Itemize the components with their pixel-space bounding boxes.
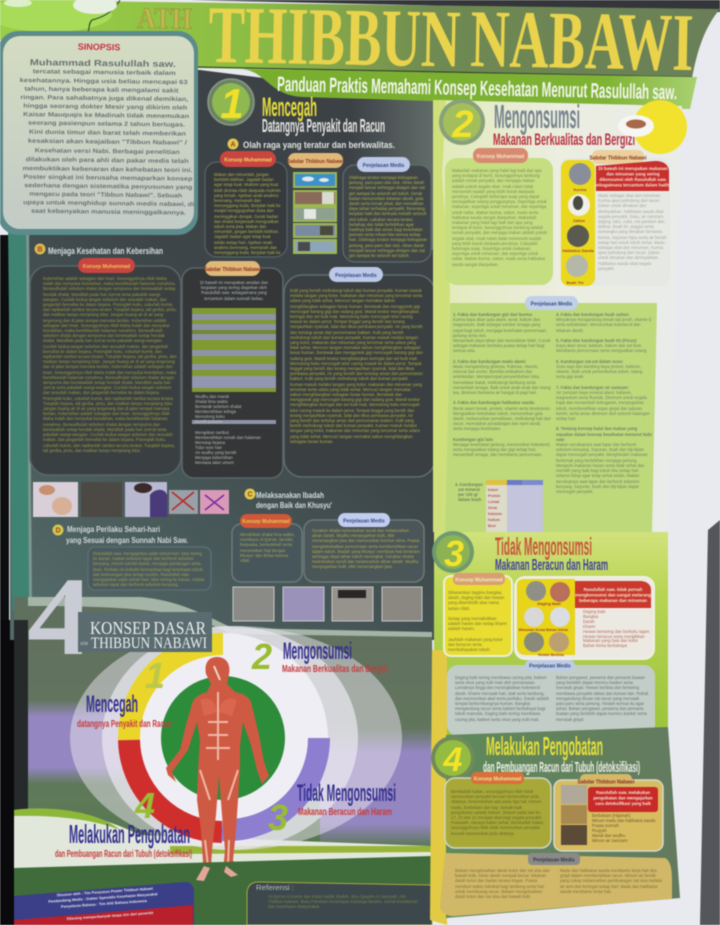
panel 3: konsep: Diharamkan bagimu bangkai, darah, daging babi dan hewan yang disembelih atas nama selain Allah.: [448, 590, 504, 611]
pill: Penjelasan Medis: [529, 664, 571, 670]
label: Mengonsumsi: Mengonsumsi: [283, 638, 352, 665]
panel 4: medical explanation: [440, 853, 672, 916]
pill: Sabdar Thibbun Nabawi: [204, 267, 262, 273]
food strip: Buah Tin: [566, 280, 584, 285]
synopsis text: sederhana dengan sistematika penyusunan yang: [24, 183, 193, 191]
panel B: nabawi list: Shalat lima waktu: [195, 399, 228, 404]
panel 2: konsep: [445, 148, 553, 285]
panel A: images: [287, 153, 345, 253]
heading: section 3: [495, 533, 608, 574]
text: Datangnya Penyakit dan Racun: [262, 116, 385, 136]
panel C: medical explanation: [304, 513, 424, 582]
panel B: nabawi list: Menutup bejana: [195, 440, 225, 445]
panel B: nabawi list: [182, 261, 283, 478]
panel 2: medical explanation: 2. Fakta dan kandungan madu alami:: [453, 359, 526, 364]
panel 2: nabawi foods: Madu sebagai obat dan minuman. Kurma ajwa pelindung dari racun. Zaitun untuk dimakan dan diminyakkan. Habbatus sauda obat segala penyakit. Susu, air zamzam, daging, labu, cuka, roti gandum dan delima. Buah tin, anggur serta semangka yang dimakan bersama kurma. Sayuran hijau serta air bersih setiap hari untuk tubuh sehat. Madu sebagai obat dan minuman. Kurma ajwa pelindung dari racun. Zaitun untuk dimakan dan diminyakkan. Habbatus sauda obat segala penyakit.: [598, 193, 666, 271]
right column base: [433, 100, 687, 532]
panel 2: medical explanation: Air zamzam kaya mineral alami: kalsium, magnesium serta fluorida. Diminum untuk segala hajat dan menambah kebugaran, menyegarkan tubuh, membersihkan organ ginjal dan saluran kemih, serta aman diminum oleh seluruh kalangan setiap hari.: [556, 390, 650, 421]
pill: Konsep Muhammad: [474, 776, 521, 782]
panel B: medical explanation: [284, 267, 435, 477]
wheel numbers: 3: [268, 797, 288, 838]
panel 2: nabawi foods: [560, 150, 672, 286]
panel 4: konsep: Berobatlah kalian, sesungguhnya Allah tidak menurunkan penyakit kecuali menurunkan pula obatnya. Kesembuhan ada pada tiga hal: minum madu, berbekam dan kay. Sebaik-baik pengobatan adalah bekam. Bekam pada hari ke-17, 19 dan 21 menjadi obat bagi segala penyakit. Puasalah, niscaya kalian sehat. Berobatlah kalian, sesungguhnya Allah tidak menurunkan penyakit kecuali menurunkan pula obatnya.: [451, 789, 544, 836]
section 3 background: [430, 532, 668, 925]
panel: credits: Disusun oleh : Tim Penyusun Poster Thibbun Nabawi: [57, 887, 153, 897]
panel: references: Al-Qur'an Al-Karim dan Kitab Hadits Shahih. Ibnu Qayyim Al-Jauziyah, Ath-Thibbun Nabawi. Buku Panduan Kesehatan Keluarga Muslim. Jurnal Kedokteran dan Kesehatan Masyarakat.: [268, 894, 418, 909]
subheading A: A: [230, 142, 236, 148]
nutrition table: Kalium: [488, 518, 500, 522]
label: Mencegah: Mencegah: [86, 691, 138, 718]
panel: credits: [14, 882, 194, 925]
panel 3: nabawi forbidden foods: [515, 577, 654, 659]
panel 3: medical explanation: Daging babi sering membawa cacing pita, bakteri serta virus yang sulit mati oleh pemanasan. Lemaknya tinggi dan meningkatkan kolesterol darah. Khamr merusak hati, otak serta lambung, dan menurunkan akal serta perilaku. Darah adalah tempat berkembangnya kuman. Bangkai mengandung racun serta bakteri berbahaya bagi tubuh manusia. Daging babi sering membawa cacing pita, bakteri serta virus yang sulit mati.: [455, 675, 549, 722]
heading: section 2: Mengonsumsi: [494, 98, 580, 135]
panel B: nabawi list: Membersihkan telinga: [195, 409, 236, 414]
ring segment: yellow: [129, 644, 222, 740]
title: [137, 0, 694, 88]
panel: synopsis: [0, 31, 198, 235]
panel 3: nabawi forbidden foods: Khamr: [583, 624, 595, 629]
synopsis text: Muhammad Rasulullah saw.: [30, 57, 176, 69]
text: Tidak Mengonsumsi: [297, 780, 396, 807]
photos: [561, 785, 587, 845]
badge: number 1: [208, 79, 254, 127]
panel 2: medical explanation: [445, 296, 657, 532]
heading: section 2: [493, 98, 635, 149]
nutrition table: Protein: [488, 494, 500, 498]
heading: four basic concepts: ATH: [80, 641, 88, 646]
nutrition table: Besi: [488, 524, 496, 528]
figure: human muscle body: [166, 657, 269, 882]
heading: four basic concepts: [78, 612, 212, 652]
food strip: Habbatus Sauda: [562, 248, 594, 253]
nutrition table: zat mineral: [458, 487, 480, 492]
badge: number 3: 3: [444, 533, 464, 574]
icon: food plate: [618, 115, 654, 137]
subheading B: [34, 244, 163, 256]
diagram: wheel ring: [118, 633, 328, 843]
panel B: nabawi list: Menjaga kebersihan: [195, 455, 233, 460]
red callout: [595, 161, 672, 191]
panel: credits: Penyelaras Bahasa : Tim Ahli Bahasa Indonesia: [61, 899, 148, 909]
subheading D: Menjaga Perilaku Sehari-hari: [67, 525, 160, 534]
heading: section 1: Mencegah: [262, 92, 317, 122]
synopsis text: saat kebanyakan manusia meninggalkannya.: [31, 209, 186, 217]
panel 3: nabawi forbidden foods: Darah: [583, 619, 594, 624]
food strip: Kurma: [574, 187, 587, 192]
label: Mengonsumsi: Makanan Berkualitas dan Bergizi: [282, 663, 388, 675]
label: Mengonsumsi: [282, 638, 388, 675]
badge: number 3: [432, 531, 474, 574]
wheel numbers: 4: [134, 785, 155, 826]
wheel numbers: 1: [145, 655, 165, 696]
panel 3: nabawi forbidden foods: Makanan yang basi dan kotor: [583, 638, 638, 643]
panel 2: medical explanation: 1. Fakta dan kandungan gizi dari kurma:: [453, 312, 533, 317]
panel B: konsep: Kebersihan adalah sebagian dari iman. Sesungguhnya Allah Maha Indah dan menyukai keindahan, maka bersihkanlah halaman rumahmu. Berwudhulah sebelum shalat dengan sempurna dan bersiwaklah setiap hendak shalat. Mandilah pada hari Jum'at serta pakailah wangi-wangian. Cucilah kedua tangan sebelum dan sesudah makan, dan janganlah bernafas ke dalam bejana. Potonglah kuku, cukurlah kumis, dan rapikanlah rambut secara teratur. Tutuplah bejana, tali geriba, pintu, dan matikan lampu menjelang tidur. Jangan buang air di air yang tergenang dan di jalan tempat manusia berlalu. Kebersihan adalah sebagian dari iman. Sesungguhnya Allah Maha Indah dan menyukai keindahan, maka bersihkanlah halaman rumahmu. Berwudhulah sebelum shalat dengan sempurna dan bersiwaklah setiap hendak shalat. Mandilah pada hari Jum'at serta pakailah wangi-wangian. Cucilah kedua tangan sebelum dan sesudah makan, dan janganlah bernafas ke dalam bejana. Potonglah kuku, cukurlah kumis, dan rapikanlah rambut secara teratur. Tutuplah bejana, tali geriba, pintu, dan matikan lampu menjelang tidur. Jangan buang air di air yang tergenang dan di jalan tempat manusia berlalu. Kebersihan adalah sebagian dari iman. Sesungguhnya Allah Maha Indah dan menyukai keindahan, maka bersihkanlah halaman rumahmu. Berwudhulah sebelum shalat dengan sempurna dan bersiwaklah setiap hendak shalat. Mandilah pada hari Jum'at serta pakailah wangi-wangian. Cucilah kedua tangan sebelum dan sesudah makan, dan janganlah bernafas ke dalam bejana. Potonglah kuku, cukurlah kumis, dan rapikanlah rambut secara teratur. Tutuplah bejana, tali geriba, pintu, dan matikan lampu menjelang tidur. Jangan buang air di air yang tergenang dan di jalan tempat manusia berlalu. Kebersihan adalah sebagian dari iman. Sesungguhnya Allah Maha Indah dan menyukai keindahan, maka bersihkanlah halaman rumahmu. Berwudhulah sebelum shalat dengan sempurna dan bersiwaklah setiap hendak shalat. Mandilah pada hari Jum'at serta pakailah wangi-wangian. Cucilah kedua tangan sebelum dan sesudah makan, dan janganlah bernafas ke dalam bejana. Potonglah kuku, cukurlah kumis, dan rapikanlah rambut secara teratur. Tutuplah bejana, tali geriba, pintu, dan matikan lampu menjelang tidur.: [43, 276, 177, 453]
synopsis text: tercatat sebagai manusia terbaik dalam: [33, 69, 176, 77]
red callout: Di bawah ini merupakan makanan: [598, 166, 668, 171]
panel A: images: Sabdar Thibbun Nabawi: [287, 159, 345, 165]
panel 2: medical explanation: Susu sapi dan kambing kaya protein, kalsium, vitamin. Baik untuk pertumbuhan tubuh, tulang serta gigi anak.: [556, 364, 642, 379]
panel 2: medical explanation: 7. Fakta dan kandungan air zamzam:: [556, 385, 629, 390]
bottom green base: [14, 856, 432, 925]
panel B: nabawi list: Merapikan rambut: [195, 430, 229, 435]
panel 2: medical explanation: 4. Fakta dan kandungan buah zaitun:: [556, 312, 630, 317]
food strip: [561, 160, 595, 286]
pill: [329, 267, 383, 282]
pill: [528, 853, 580, 865]
subheading C: C: [247, 492, 253, 498]
pill: [204, 261, 262, 276]
panel B: nabawi list: Bersiwak sebelum shalat: [195, 404, 241, 409]
panel 4: nabawi treatments: [554, 774, 663, 851]
panel 2: medical explanation: 6. Kandungan zat-zat dalam susu:: [556, 359, 623, 364]
nutrition table: Kalsium: [488, 512, 502, 516]
panel C: konsep: [232, 514, 302, 582]
yellow image area: Daging Babi: [537, 601, 561, 606]
synopsis text: kesehatannya. Hingga usia beliau mencapai 63: [20, 78, 188, 86]
synopsis text: mengacu pada teori "Tibbun Nabawi". Sebuah: [29, 192, 183, 200]
panel 2: medical explanation: Kurma kaya akan gula alami, serat, kalium dan magnesium. Baik sebagai sumber tenaga yang cepat bagi tubuh, menjaga kesehatan pencernaan, jantung serta otot.: [453, 317, 547, 338]
badge: number 4: 4: [443, 741, 463, 779]
subheading D: yang Sesuai dengan Sunnah Nabi Saw.: [66, 536, 188, 545]
subheading B: B: [37, 246, 43, 254]
panel 2: medical explanation: Kandungan gizi lain:: [453, 437, 494, 442]
red callout: dan minuman yang sering: [606, 172, 660, 176]
heading: section 3: Makanan Beracun dan Haram: [495, 557, 608, 574]
red callout: beberapa makanan dan minuman: [579, 598, 647, 603]
feet over base: [196, 866, 238, 881]
pill: [78, 258, 135, 273]
synopsis text: Kini dunia timur dan barat telah memberikan: [29, 130, 186, 138]
text: Melakukan Pengobatan: [69, 819, 190, 849]
badge: number 1: 1: [220, 80, 244, 127]
nutrition table: per 100 gr: [458, 492, 478, 497]
label: Melakukan Pengobatan: [55, 819, 192, 860]
pill: [525, 660, 575, 671]
panel 2: medical explanation: Berisi asam lemak, protein, vitamin serta timokuinon. Menguatkan kekebalan tubuh, menurunkan gula darah, melancarkan pernafasan, melindungi hati dari racun, meredakan peradangan dan nyeri sendi, serta menjaga kesehatan.: [453, 406, 551, 431]
panel 4: nabawi treatments: Minum air zamzam: [592, 838, 627, 843]
panel 3: konsep: Setiap yang memabukkan adalah haram dan setiap khamr adalah haram.: [448, 616, 507, 631]
panel 4: konsep: [445, 772, 551, 848]
panel B: nabawi list: Memotong kuku: [195, 414, 225, 419]
label: Melakukan Pengobatan: dan Pembuangan Racun dari Tubuh (detoksifikasi): [55, 848, 192, 860]
yellow image area: Bahan Kimia: [546, 628, 569, 632]
panel C: medical explanation: Gerakan shalat melenturkan sendi dan melancarkan aliran darah. Wudhu menyegarkan kulit, zikir menenangkan jiwa dan menurunkan hormon stres. Puasa mengistirahatkan pencernaan serta membersihkan racun dalam tubuh. Ibadah yang khusyu' membuat hati tenteram sehingga daya tahan tubuh meningkat. Gerakan shalat melenturkan sendi dan melancarkan aliran darah. Wudhu menyegarkan kulit, zikir menenangkan jiwa.: [312, 528, 420, 569]
pill: Konsep Muhammad: [224, 158, 272, 164]
panel 3: nabawi forbidden foods: Hewan bertaring dan berkuku tajam: [583, 629, 649, 634]
pill: Penjelasan Medis: [343, 518, 385, 524]
center circle: [161, 676, 285, 800]
panel 4: medical explanation: Madu dan habbatus sauda membantu kerja hati dan ginjal dalam membersihkan racun. Minum air bersih yang cukup melancarkan pembuangan zat sisa melalui air seni dan keringat setiap hari. Madu dan habbatus sauda membantu kerja hati.: [560, 868, 662, 894]
diagram: wheel halo: [70, 626, 402, 850]
wheel numbers: 2: [251, 636, 272, 677]
yellow image area: Minuman Keras: [519, 628, 545, 632]
panel 2: medical explanation: Minyaknya mengandung lemak tak jenuh, vitamin E serta antioksidan. Menurunkan kolesterol dan tekanan darah.: [556, 317, 652, 333]
panel: credits: Dilarang memperbanyak tanpa izin dari penerbit: [67, 911, 154, 921]
red callout: Rasulullah saw. melakukan: [596, 790, 650, 795]
panel 2: konsep: Makanlah makanan yang halal lagi baik dari apa yang terdapat di bumi. Sesungguhnya lambung adalah rumah penyakit, dan menjaga makan adalah pokok segala obat. Anak Adam tidak memenuhi wadah yang lebih buruk daripada perutnya. Cukuplah beberapa suap yang dapat menegakkan tulang punggungnya. Sepertiga untuk makanan, sepertiga untuk minuman, dan sepertiga untuk nafas. Makan kurma, zaitun, madu serta habbatus sauda sangat dianjurkan. Makanlah makanan yang halal lagi baik dari apa yang terdapat di bumi. Sesungguhnya lambung adalah rumah penyakit, dan menjaga makan adalah pokok segala obat. Anak Adam tidak memenuhi wadah yang lebih buruk daripada perutnya. Cukuplah beberapa suap. Sepertiga untuk makanan, sepertiga untuk minuman, dan sepertiga untuk nafas. Makan kurma, zaitun, madu serta habbatus sauda sangat dianjurkan.: [452, 168, 547, 267]
red callout: dikonsumsi oleh Rasulullah saw.: [599, 177, 667, 182]
food strip: Zaitun: [573, 218, 586, 223]
panel B: nabawi list: Tidur sore hari: [195, 445, 222, 450]
panel 4: nabawi treatments: Berbekam (Hijamah): [592, 813, 630, 818]
synopsis text: membuktikan kebenaran dan kehebatan teori ini.: [22, 166, 193, 174]
panel 2: medical explanation: 3. Fakta dan kandungan habbatus sauda:: [453, 400, 535, 405]
pill: Penjelasan Medis: [531, 302, 573, 308]
red callout: [575, 581, 651, 608]
synopsis text: Poster singkat ini berusaha memaparkan konsep: [23, 175, 193, 183]
photo row: health habits: [33, 482, 229, 517]
panel 2: medical explanation: Madu mengandung glukosa, fruktosa, vitamin, mineral dan enzim. Bersifat antibakteri dan antioksidan. Mempercepat penyembuhan luka, meredakan batuk, melindungi lambung serta menambah tenaga. Baik untuk anak-anak dan orang tua, diminum bersama air hangat di pagi hari.: [453, 364, 551, 395]
heading: four basic concepts: KONSEP DASAR: [90, 618, 206, 638]
pill: Penjelasan Medis: [335, 273, 377, 279]
yellow image area: [517, 579, 575, 657]
panel 3: medical explanation: [447, 660, 655, 736]
panel 4: medical explanation: Bekam mengeluarkan darah kotor dan zat sisa dari bawah kulit. Aliran darah menjadi lancar, tekanan darah turun dan badan terasa ringan. Puasa memberi waktu istirahat bagi lambung serta hati untuk membuang racun. Bekam mengeluarkan darah kotor dan zat sisa dari bawah kulit.: [455, 868, 550, 899]
panel: references: Referensi :: [256, 885, 294, 892]
panel 4: nabawi treatments: Mandi dan wudhu: [592, 833, 625, 838]
synopsis text: seorang pasienpun selama 2 tahun bertugas.: [28, 121, 186, 129]
nutrition table: [455, 480, 543, 532]
label: Mencegah: datangnya Penyakit dan Racun: [77, 718, 172, 730]
panel: credits: Pembimbing Medis : Dokter Spesialis Kesehatan Masyarakat: [48, 892, 158, 904]
synopsis text: Kesehatan versi Nabi. Berbagai penelitian: [35, 148, 180, 156]
panel 2: medical explanation: Kaya akan serat, kalsium, kalium dan zat besi. Membantu pencernaan serta menguatkan tulang.: [556, 343, 648, 353]
red callout: cara detoksifikasi yang baik: [595, 801, 651, 806]
panel 3: nabawi forbidden foods: Hewan beracun serta menjijikkan: [583, 634, 645, 639]
synopsis text: tahun, hanya beberapa kali mengalami sakit: [24, 87, 179, 94]
wheel numbers: [134, 636, 288, 838]
section: four basic concepts background: [14, 597, 436, 925]
pill: Penjelasan Medis: [363, 163, 405, 169]
panel 4: nabawi treatments: Minum madu dan habbatus sauda: [592, 818, 655, 823]
red callout: Rasulullah saw. tidak pernah: [584, 587, 643, 592]
nutrition table: 4. Kandungan: [455, 482, 483, 487]
subheading C: Melaksanakan Ibadah: [256, 491, 324, 500]
red callout: mengkonsumsi dan sangat melarang: [575, 592, 651, 598]
synopsis text: [18, 57, 196, 217]
subheading A: Olah raga yang teratur dan berkwalitas.: [243, 140, 395, 150]
pill: Konsep Muhammad: [83, 264, 130, 270]
ring segment: purple: [222, 738, 319, 830]
panel 2: medical explanation: 5. Fakta dan kandungan buah tin (Ficus):: [556, 338, 637, 343]
panel D: text: Rasulullah saw. mengajarkan adab sehari-hari: tidur miring ke kanan, makan sebelum lapar dan berhenti sebelum kenyang, minum sambil duduk, menjaga pandangan serta lisan. Perilaku ini terbukti bermanfaat bagi kesehatan tubuh dan ketenangan jiwa setiap muslim. Rasulullah saw. mengajarkan adab sehari-hari: tidur miring ke kanan, makan sebelum lapar dan berhenti sebelum kenyang.: [93, 551, 205, 587]
dark panel: prevention: [10, 62, 438, 640]
label: Tidak Mengonsumsi: Makanan Beracun dan Haram: [298, 806, 392, 818]
left teal strip: [8, 225, 32, 610]
badge: number 2: [439, 99, 485, 146]
photo row: worship: [233, 587, 422, 621]
panel B: medical explanation: Kulit yang bersih melindungi tubuh dari kuman penyakit. Kuman masuk melalui tangan yang kotor, makanan dan minuman yang tercemar serta udara yang tidak sehat. Mencuci tangan memakai sabun menghilangkan sebagian besar kuman. Bersiwak dan menggosok gigi mencegah karang gigi dan radang gusi. Mandi teratur menghilangkan keringat dan sel kulit mati. Memotong kuku mencegah telur cacing masuk ke dalam perut. Tempat tinggal yang bersih dan terang menjauhkan nyamuk, lalat dan tikus pembawa penyakit. Air yang bersih dan tertutup aman dari pencemaran bakteri. Kulit yang bersih melindungi tubuh dari kuman penyakit. Kuman masuk melalui tangan yang kotor, makanan dan minuman yang tercemar serta udara yang tidak sehat. Mencuci tangan memakai sabun menghilangkan sebagian besar kuman. Bersiwak dan menggosok gigi mencegah karang gigi dan radang gusi. Mandi teratur menghilangkan keringat dan sel kulit mati. Memotong kuku mencegah telur cacing masuk ke dalam perut. Tempat tinggal yang bersih dan terang menjauhkan nyamuk, lalat dan tikus pembawa penyakit. Air yang bersih dan tertutup aman dari pencemaran bakteri. Kulit yang bersih melindungi tubuh dari kuman penyakit. Kuman masuk melalui tangan yang kotor, makanan dan minuman yang tercemar serta udara yang tidak sehat. Mencuci tangan memakai sabun menghilangkan sebagian besar kuman. Bersiwak dan menggosok gigi mencegah karang gigi dan radang gusi. Mandi teratur menghilangkan keringat dan sel kulit mati. Memotong kuku mencegah telur cacing masuk ke dalam perut. Tempat tinggal yang bersih dan terang menjauhkan nyamuk, lalat dan tikus pembawa penyakit. Air yang bersih dan tertutup aman dari pencemaran bakteri. Kulit yang bersih melindungi tubuh dari kuman penyakit. Kuman masuk melalui tangan yang kotor, makanan dan minuman yang tercemar serta udara yang tidak sehat. Mencuci tangan memakai sabun menghilangkan sebagian besar kuman.: [290, 288, 423, 444]
panel A: medical explanation: Olahraga teratur menjaga kebugaran jantung, paru-paru dan otot. Aliran darah menjadi lancar sehingga oksigen dan zat gizi sampai ke seluruh sel tubuh. Gerak badan menurunkan tekanan darah, gula darah serta lemak jahat, dan menaikkan daya tahan terhadap penyakit. Berenang, berjalan kaki dan berkuda melatih seluruh otot tubuh. Lakukan secara teratur, bertahap dan tidak berlebihan agar hasilnya baik dan aman bagi kesehatan jasmani serta rohani kita semua setiap hari. Olahraga teratur menjaga kebugaran jantung, paru-paru dan otot. Aliran darah menjadi lancar sehingga oksigen dan zat gizi sampai ke seluruh sel tubuh.: [349, 175, 427, 258]
header band: [0, 0, 720, 78]
panel 2: medical explanation: 8. Tentang konsep halal dan makan yang sepadan dalam konsep kesehatan menurut Nabi saw:: [556, 426, 652, 442]
panel 3: konsep: [444, 573, 512, 656]
panel C: konsep: Mendirikan shalat lima waktu, membaca Al-Qur'an, berzikir, berpuasa, bersedekah serta menunaikan haji dengan khusyu' dan ikhlas karena Allah.: [240, 532, 295, 563]
pill: Konsep Muhammad: [242, 519, 290, 525]
label: Mencegah: [77, 691, 172, 730]
subheading B: Menjaga Kesehatan dan Kebersihan: [48, 246, 163, 256]
synopsis text: kesaksian akan keajaiban "Tibbun Nabawi" /: [28, 139, 187, 147]
subheading C: dengan Baik dan Khusyu': [256, 501, 332, 510]
pill: Konsep Muhammad: [455, 578, 503, 584]
badge: number 2: 2: [451, 104, 474, 146]
panel 2: medical explanation: Menambah daya tahan dan meredakan lelah. Cocok sebagai makanan berbuka puasa setiap hari bagi semua usia.: [453, 338, 550, 353]
panel 4: nabawi treatments: Puasa sunnah: [592, 823, 619, 828]
panel B: nabawi list: Air wudhu yang bersih: [195, 450, 236, 455]
subheading D: [52, 524, 188, 545]
panel 2: medical explanation: Makan secukupnya saat lapar dan berhenti sebelum kenyang. Sayuran, buah dan biji-bijian dapat mencegah penyakit. Menghindari makanan berlemak yang berlebihan menjaga jantung. Menjauhi makanan haram serta tidak sehat dan memilih yang baik bagi tubuh kita setiap hari selama hidup agar tetap sehat selalu. Makan secukupnya saat lapar dan berhenti sebelum kenyang. Sayuran, buah dan biji-bijian dapat mencegah penyakit.: [556, 442, 648, 494]
yellow tab: [214, 633, 223, 655]
title: ATH: [137, 2, 192, 36]
panel 2: medical explanation: Menjaga kesehatan jantung, menurunkan kolesterol, serta menguatkan tulang dan gigi setiap hari, menambah tenaga, dan membantu pencernaan.: [453, 442, 550, 457]
pill: [525, 296, 578, 310]
panel 4: nabawi treatments: Ruqyah: [592, 828, 606, 833]
synopsis heading: SINOPSIS: [78, 42, 120, 52]
nutrition table: Lemak: [488, 500, 499, 504]
panel 3: konsep: Jauhilah makanan yang kotor dan beracun serta membahayakan tubuh.: [448, 637, 503, 652]
heading: section 1: [262, 92, 385, 136]
yellow image area: Hewan Berbisa: [538, 653, 565, 657]
synopsis text: ringan. Para sahabatnya juga dikenal demikian,: [20, 95, 189, 103]
ring segment: red: [129, 740, 222, 832]
panel: references: [247, 882, 432, 925]
big number 4: 4: [27, 555, 93, 679]
panel 3: nabawi forbidden foods: Bahan kimia berbahaya: [583, 643, 627, 648]
pill: Konsep Muhammad: [477, 154, 524, 160]
panel A: konsep: [205, 151, 287, 257]
pill: Sabdar Thibbun Nabawi: [590, 156, 647, 162]
table stripes: [192, 308, 276, 424]
synopsis text: Kaisar Mauquqis ke Madinah tidak menemukan: [23, 112, 190, 120]
label: Tidak Mengonsumsi: [297, 780, 396, 818]
panel B: nabawi list: Wudhu dan mandi: [195, 394, 229, 399]
subheading C: [244, 488, 332, 510]
pill: Penjelasan Medis: [533, 858, 575, 864]
red callout: sebagaimana tercantum dalam hadits: [595, 182, 672, 188]
synopsis text: upaya untuk menghidup sunnah medis nabawi, di: [23, 200, 195, 208]
panel B: nabawi list: Bersih pakaian: [195, 419, 223, 424]
subheading D: D: [55, 528, 61, 534]
panel 3: medical explanation: Bahan pengawet, pewarna dan pemanis buatan yang berlebih dapat memicu kanker serta merusak ginjal. Hewan berbisa dan bertaring membawa penyakit rabies dan kuman lain. Rokok mengandung ribuan zat racun yang merusak paru-paru serta jantung. Hindari semua itu agar sehat. Bahan pengawet, pewarna dan pemanis buatan yang berlebih dapat memicu kanker serta merusak ginjal.: [556, 675, 648, 722]
red callout: [588, 787, 658, 812]
nutrition table: Kalori: [488, 488, 498, 492]
nutrition table: dalam buah: [458, 497, 482, 502]
badge: number 4: [431, 736, 475, 780]
synopsis text: dilakukan oleh para ahli dan pakar medis telah: [26, 157, 189, 165]
panel B: nabawi list: Membersihkan rumah dan halaman: [195, 435, 261, 440]
nutrition table: Serat: [488, 506, 498, 510]
panel 3: nabawi forbidden foods: Bangkai: [583, 614, 598, 619]
panel B: nabawi list: Di bawah ini merupakan amalan dan kegiatan yang sering diajarkan oleh Rasulullah saw. sebagaimana yang tercantum dalam sunnah beliau.: [200, 280, 268, 301]
synopsis text: hingga seorang dokter Mesir yang dikirim oleh: [23, 104, 188, 112]
heading: four basic concepts: THIBBUN NABAWI: [91, 635, 207, 652]
heading: section 4: [483, 731, 640, 776]
pill: Sabdar Thibbun Nabawi: [578, 780, 635, 786]
section 4 background: [446, 727, 680, 918]
red callout: pengobatan dan mengajarkan: [593, 796, 653, 800]
